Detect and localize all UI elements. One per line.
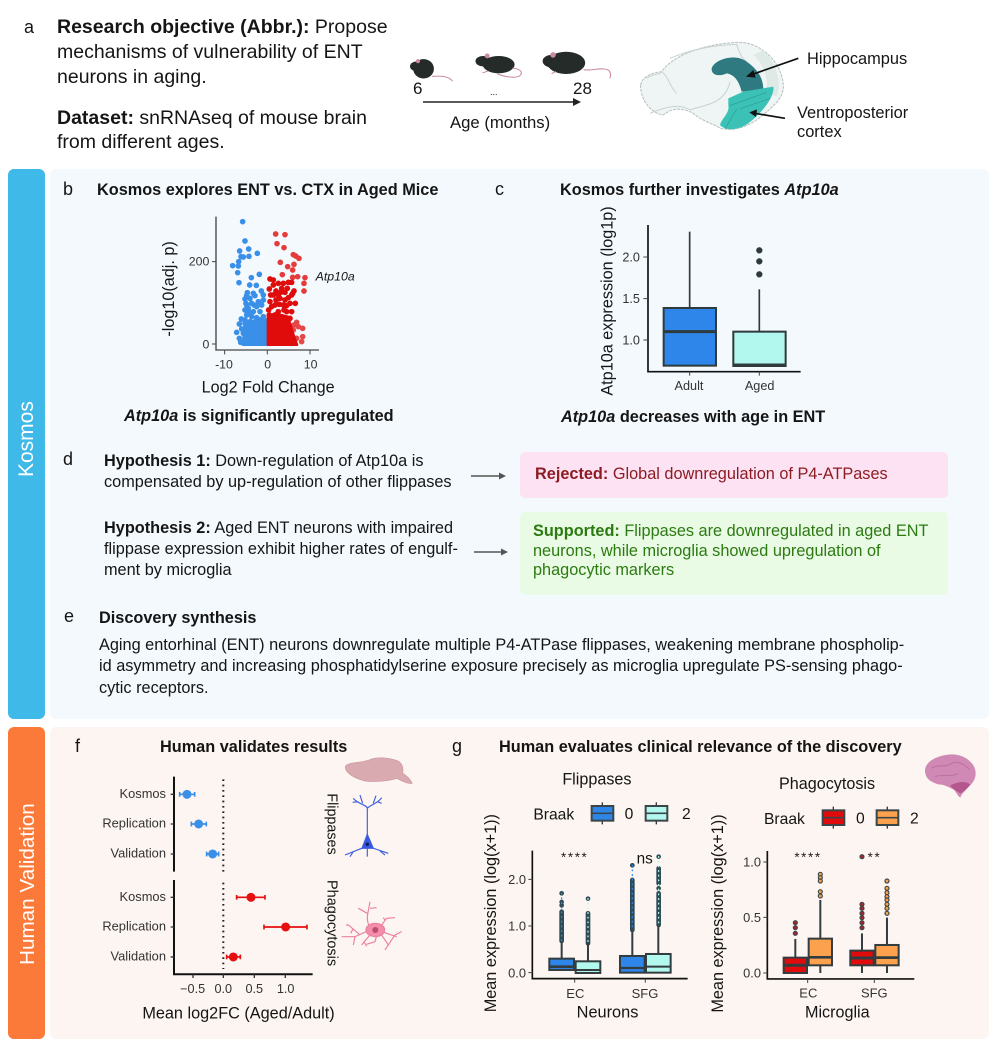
research objective text: neurons in aging. — [57, 66, 207, 88]
arrow: to hippocampus — [746, 58, 798, 78]
chart: flippases in neurons: SFG — [632, 986, 658, 1001]
arrow: to ventroposterior cortex — [749, 109, 785, 118]
tick labels: 200 — [189, 255, 209, 269]
icon: blue neuron — [345, 795, 388, 857]
callout: supported: phagocytic markers — [533, 561, 674, 579]
tick labels: 2.0 — [622, 250, 640, 264]
panel: Human Validation sidebar — [8, 727, 45, 1039]
tick labels: 1.0 — [508, 919, 526, 934]
y axis title: -log10(adj. p) — [160, 241, 178, 337]
research objective text: mechanisms of vulnerability of ENT — [57, 41, 363, 63]
zero reference line — [220, 779, 226, 872]
callout: rejected — [520, 452, 948, 498]
heading f: Human validates results — [160, 738, 347, 756]
icon: old mouse — [543, 52, 610, 78]
aged box — [733, 247, 786, 366]
arrow: hypothesis 1 to result — [471, 472, 506, 480]
icon: mice timeline — [410, 52, 610, 81]
tick labels: 0.5 — [743, 910, 761, 925]
y axis title: Mean expression (log(x+1)) — [709, 814, 727, 1013]
axis titles: Mean expression (log(x+1)) — [482, 814, 500, 1012]
panel letter e: e — [64, 606, 74, 626]
tick labels: 1.0 — [622, 333, 640, 347]
hypothesis 2: Hypothesis 2: — [104, 519, 211, 537]
gene label Atp10a: Atp10a — [315, 269, 355, 283]
research objective text: Research objective (Abbr.): — [57, 16, 310, 38]
tick labels: 2.0 — [508, 872, 526, 887]
age tick labels: 6 — [413, 79, 422, 98]
legend: 0 — [856, 810, 865, 827]
row labels: Kosmos — [120, 786, 166, 801]
tick labels — [508, 872, 526, 980]
tick labels: 0.0 — [508, 965, 526, 980]
legend: Braak — [764, 811, 805, 828]
chart title: Flippases — [562, 770, 631, 788]
dataset text: Dataset: — [57, 107, 134, 129]
callout: supported — [520, 512, 948, 595]
arrow: age axis — [423, 98, 581, 106]
facet label: flippases: Flippases — [324, 793, 340, 855]
outlier points — [793, 855, 889, 935]
icon: pink human brain — [925, 754, 976, 798]
facet label: phagocytosis: Phagocytosis — [324, 880, 340, 966]
significance: ** — [868, 849, 881, 864]
chart: phagocytosis in microglia: EC — [799, 986, 817, 1001]
icon: middle-aged mouse — [475, 54, 521, 77]
row labels — [102, 786, 166, 964]
icon: mouse brain anatomy — [641, 42, 798, 129]
tick labels — [189, 255, 209, 351]
panel b: volcano plot — [63, 179, 438, 425]
panel letter a: a — [24, 17, 35, 37]
phagocytosis estimates — [227, 894, 307, 961]
axes — [767, 851, 914, 979]
significance: **** — [561, 849, 588, 864]
conclusion c: Atp10a decreases with age in ENT — [560, 408, 825, 426]
callout: rejected: Rejected: Global downregulation of P4-ATPases — [535, 465, 888, 483]
hypothesis 1: Down-regulation of Atp10a is — [211, 452, 423, 470]
volcano chart: 0 — [264, 357, 271, 371]
tick labels: 0.0 — [743, 966, 761, 981]
outlier points — [562, 857, 659, 943]
axes — [216, 217, 319, 350]
tick labels: 1.5 — [622, 292, 640, 306]
x tick labels — [180, 982, 294, 996]
chart: flippases in neurons — [482, 770, 691, 1022]
forest plot chart — [102, 758, 412, 1023]
synthesis paragraph: id asymmetry and increasing phosphatidylserine exposure precisely as microglia upregulate PS-sensing phago- — [99, 657, 903, 675]
legend — [764, 807, 919, 829]
row labels: Replication — [102, 919, 166, 934]
panel: Human Validation content background — [50, 727, 989, 1039]
panel a: research objective header — [24, 16, 909, 153]
label: hippocampus: Hippocampus — [807, 50, 907, 68]
x axis title: Log2 Fold Change — [202, 379, 335, 397]
panel letter c: c — [495, 179, 504, 199]
volcano chart — [160, 217, 355, 397]
x tick labels: 0.5 — [246, 982, 263, 996]
ventroposterior cortex region — [720, 87, 773, 129]
panel e: discovery synthesis — [64, 606, 904, 697]
panel letter b: b — [63, 179, 73, 199]
sidebar label: Human Validation: Human Validation — [16, 803, 39, 965]
hypothesis 2: ment by microglia — [104, 561, 233, 579]
legend: 0 — [625, 806, 634, 823]
panel letter d: d — [63, 449, 73, 469]
row labels: Validation — [110, 846, 166, 861]
red points: upregulated — [268, 234, 305, 345]
axes — [648, 225, 801, 372]
label: ventroposterior cortex: Ventroposterior — [797, 104, 909, 122]
heading c: Kosmos further investigates Atp10a — [560, 181, 839, 199]
chart title: Phagocytosis — [779, 775, 875, 793]
x tick labels: 0.0 — [215, 982, 232, 996]
box plot: Adult — [675, 379, 704, 393]
hypothesis 2: Aged ENT neurons with impaired — [211, 519, 453, 537]
x axis title: Neurons — [577, 1004, 638, 1022]
volcano chart: 10 — [304, 357, 318, 371]
panel letter g: g — [452, 736, 462, 756]
arrow: hypothesis 2 to result — [474, 548, 508, 556]
x tick labels: 1.0 — [277, 982, 294, 996]
callout: supported: Flippases are downregulated in aged ENT — [620, 522, 929, 540]
label: ventroposterior cortex: cortex — [797, 123, 842, 141]
conclusion b: Atp10a is significantly upregulated — [123, 407, 394, 425]
row labels: Validation — [110, 949, 166, 964]
chart: phagocytosis in microglia: SFG — [861, 986, 888, 1001]
legend: Braak — [533, 806, 574, 823]
row labels: Replication — [102, 816, 166, 831]
flippases estimates — [180, 791, 219, 858]
age axis label: Age (months) — [450, 113, 550, 132]
dataset text: snRNAseq of mouse brain — [134, 107, 367, 129]
panel c: Atp10a box plot — [495, 179, 839, 426]
row labels: Kosmos — [120, 889, 166, 904]
tick labels: 1.0 — [743, 855, 761, 870]
whiskers and boxes — [784, 900, 899, 973]
tick labels — [622, 250, 640, 347]
research objective text: Propose — [310, 16, 388, 38]
panel: Kosmos content background — [50, 169, 989, 719]
heading g: Human evaluates clinical relevance of the discovery — [499, 738, 902, 756]
ellipsis between ages: ... — [490, 87, 498, 97]
icon: pink mouse brain — [345, 758, 412, 784]
x tick labels: −0.5 — [180, 982, 205, 996]
adult box — [664, 232, 716, 366]
x axis title: Microglia — [805, 1004, 870, 1022]
box plot: Aged — [745, 379, 774, 393]
y axis title: Atp10a expression (log1p) — [599, 206, 617, 396]
icon: young mouse — [410, 59, 453, 81]
legend: 2 — [910, 810, 919, 827]
synthesis paragraph: cytic receptors. — [99, 679, 208, 697]
hypothesis 2: flippase expression exhibit higher rates of engulf- — [104, 540, 458, 558]
axes — [532, 851, 688, 979]
tick labels — [743, 855, 761, 981]
blue points: downregulated — [233, 222, 267, 345]
synthesis paragraph: Aging entorhinal (ENT) neurons downregulate multiple P4-ATPase flippases, weakening membrane phospholip- — [99, 636, 904, 654]
hypothesis 1: compensated by up-regulation of other flippases — [104, 473, 452, 491]
whiskers and boxes — [549, 927, 671, 973]
chart: flippases in neurons: EC — [566, 986, 584, 1001]
tick labels: 0 — [202, 337, 209, 351]
legend: 2 — [682, 806, 691, 823]
panel: Kosmos sidebar — [8, 169, 45, 719]
significance: **** — [794, 849, 822, 864]
x axis title: Mean log2FC (Aged/Adult) — [142, 1005, 335, 1023]
significance: ns — [637, 850, 653, 867]
heading b: Kosmos explores ENT vs. CTX in Aged Mice — [97, 181, 438, 199]
volcano chart: -10 — [215, 357, 233, 371]
heading e: Discovery synthesis — [99, 609, 256, 627]
box plot — [599, 206, 801, 396]
callout: supported: neurons, while microglia showed upregulation of — [533, 542, 881, 560]
panel f: forest plot — [75, 736, 412, 1023]
hippocampus region — [712, 57, 763, 92]
dataset text: from different ages. — [57, 131, 225, 153]
chart: phagocytosis in microglia — [709, 775, 919, 1022]
panel g: clinical relevance box plots — [452, 736, 976, 1022]
sidebar label: Kosmos: Kosmos — [15, 401, 38, 477]
callout: supported: Supported: — [533, 522, 620, 540]
legend — [533, 802, 691, 824]
hypothesis 1: Hypothesis 1: — [104, 452, 211, 470]
icon: pink microglia — [342, 902, 402, 950]
axes — [174, 777, 313, 974]
panel d: hypotheses — [63, 449, 948, 595]
panel letter f: f — [75, 736, 81, 756]
age tick labels: 28 — [573, 79, 592, 98]
